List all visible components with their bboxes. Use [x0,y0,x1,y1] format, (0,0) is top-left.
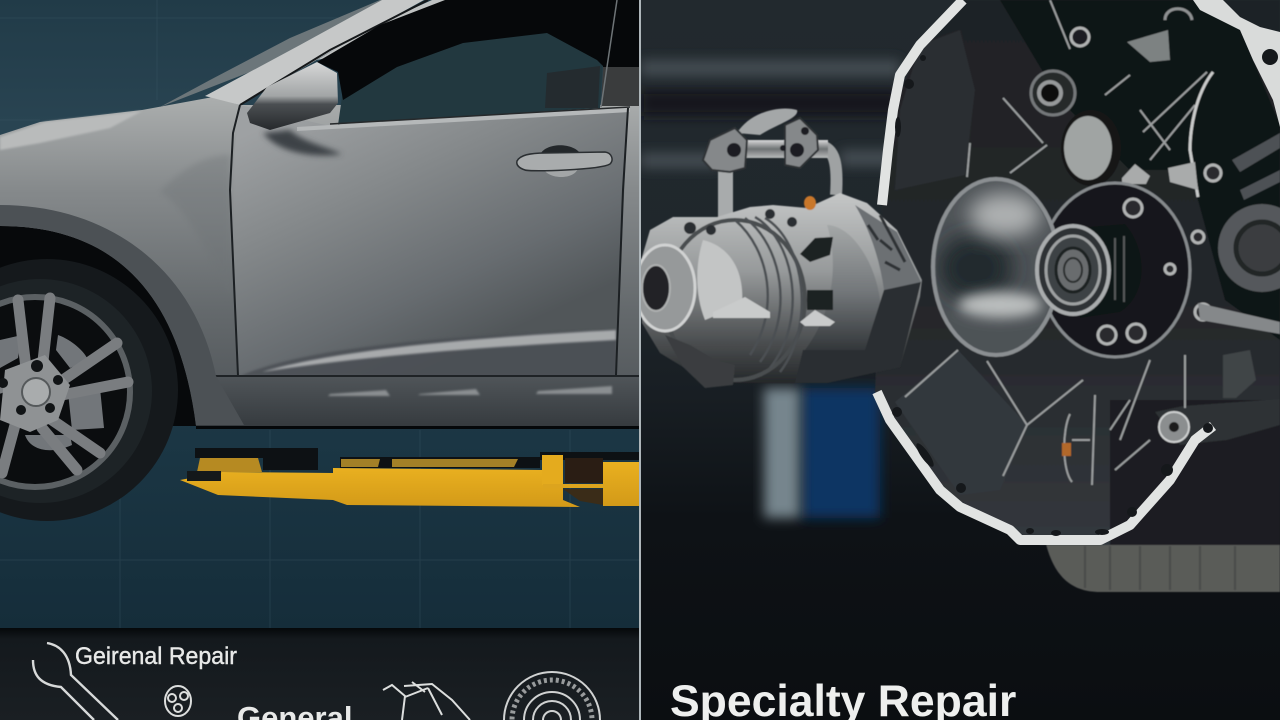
dark centre [937,234,1013,302]
blue glow block [802,388,880,518]
arm notch [187,471,221,481]
rear glass [601,67,640,106]
transmission housing [875,0,1280,592]
ribs [755,217,793,368]
bottom light [958,292,1042,318]
upper bolt boss [1031,71,1075,115]
shaft rings [1037,226,1109,314]
handle bar [517,152,612,171]
car [0,0,640,521]
workshop backdrop [0,0,640,628]
rear fins [855,205,921,290]
bolts [765,209,775,219]
white arc rib [1190,72,1213,197]
top shadow block [195,448,640,470]
disc rings [504,672,600,720]
bottom dark wedge [795,282,921,383]
top fittings [703,118,818,172]
wheel well [0,226,196,426]
lower door shade [242,338,470,375]
front seat [545,66,600,108]
gasket frame [877,0,1213,540]
right arm [603,462,640,506]
silver cylinder [697,240,742,320]
horizontal pipe [738,140,828,158]
windshield strip [160,0,385,107]
handle lower recess [546,170,577,177]
dark holes [800,237,833,310]
lower bracket shadow [1110,400,1280,545]
small top ring [1071,28,1089,46]
hub cap [22,378,50,406]
top bolts [684,209,797,235]
icon: brake caliper [383,682,470,720]
gasket holes [892,49,1278,536]
spokes [0,298,128,473]
lower bracket strip [543,484,603,488]
roof seam [240,0,428,105]
upper arm plate [197,458,262,472]
bolts [1124,199,1142,217]
upper dark section [1000,0,1280,340]
icon: brake disc [504,672,600,720]
horizontal bands [640,60,900,168]
shaft coil [1115,236,1124,302]
front door panel [230,105,628,376]
lower door reflection [262,330,616,372]
mounting plate [1040,183,1190,357]
side glass [338,28,605,125]
orange valve [804,196,816,210]
upper strip [341,459,518,467]
right pulley [1218,204,1280,292]
front core [642,265,670,311]
gasket outline [877,0,1280,540]
fin marks [868,215,905,270]
lower casing [1045,540,1280,592]
panel: specialty repair [635,0,1280,720]
upper right struts [1232,133,1280,200]
plate bolts [1098,165,1221,344]
label: general repair: Geirenal Repair [75,643,237,670]
hood highlight [0,111,142,150]
white light column [764,388,800,518]
top right frame [1193,0,1280,127]
lift arm [180,448,640,507]
light patches [1122,162,1198,190]
lower bracket shade [563,489,603,505]
cylinder dark band [665,220,805,380]
panel: general repair [0,0,640,720]
cylinder ribs [735,217,802,372]
motor body [642,193,922,387]
fitting bolts [727,127,809,157]
disc clipped shading [937,193,1042,318]
disc face [933,179,1059,355]
sill reflections [328,386,612,396]
window frame [317,0,640,105]
compressor motor [635,108,922,388]
holes [904,79,914,89]
output shaft [1075,224,1142,318]
fender crease shade [168,156,229,194]
lower wedge [895,350,1027,495]
yellow post [542,455,563,485]
under-car shadow line [196,426,640,429]
structural ribs [905,0,1207,485]
small top bracket [1165,9,1192,20]
icon: wrench [33,643,118,720]
front wheel [0,259,178,521]
left wall shade [895,30,975,190]
handle upper recess [542,145,579,152]
spoke set [0,298,128,473]
left pipe [718,160,733,218]
textured top patch [1127,30,1170,62]
car body shell [0,97,640,425]
top cap [1061,110,1121,186]
B pillar line [601,0,617,107]
nut outline [165,686,191,716]
blurred workshop background [641,0,1280,720]
second roof strip [317,0,450,60]
window sill chrome [297,107,630,131]
background light bands [640,60,900,168]
roof white band [205,0,424,105]
lower bracket [1155,399,1280,445]
center divider [639,0,641,720]
rim barrel [0,297,130,487]
right gray block [1223,350,1256,398]
wheel arch [0,205,244,425]
brake rotor patches [0,335,104,450]
orange fitting [1062,443,1071,456]
main arm [180,468,580,507]
right pipe [820,146,837,195]
side sill [196,376,640,426]
light tabs [713,297,835,326]
smooth rear barrel [805,225,880,350]
label strip [0,628,640,720]
top arch [737,108,797,135]
front ring [635,245,695,331]
hub [0,355,70,432]
dark bracket [565,458,603,483]
housing body [875,0,1280,545]
mirror shadow [263,130,342,156]
icon: nut [165,686,191,716]
tyre [0,259,178,521]
door seam [229,104,629,375]
casing ribs [1085,546,1235,590]
top light [969,193,1041,237]
lower boss [1159,412,1189,442]
lower left cluster [665,335,735,388]
right strut [1198,303,1280,334]
large disc [933,179,1059,355]
door handle [517,145,612,177]
mirror housing [247,62,338,130]
door mirror [247,62,342,156]
bolts [727,143,741,157]
